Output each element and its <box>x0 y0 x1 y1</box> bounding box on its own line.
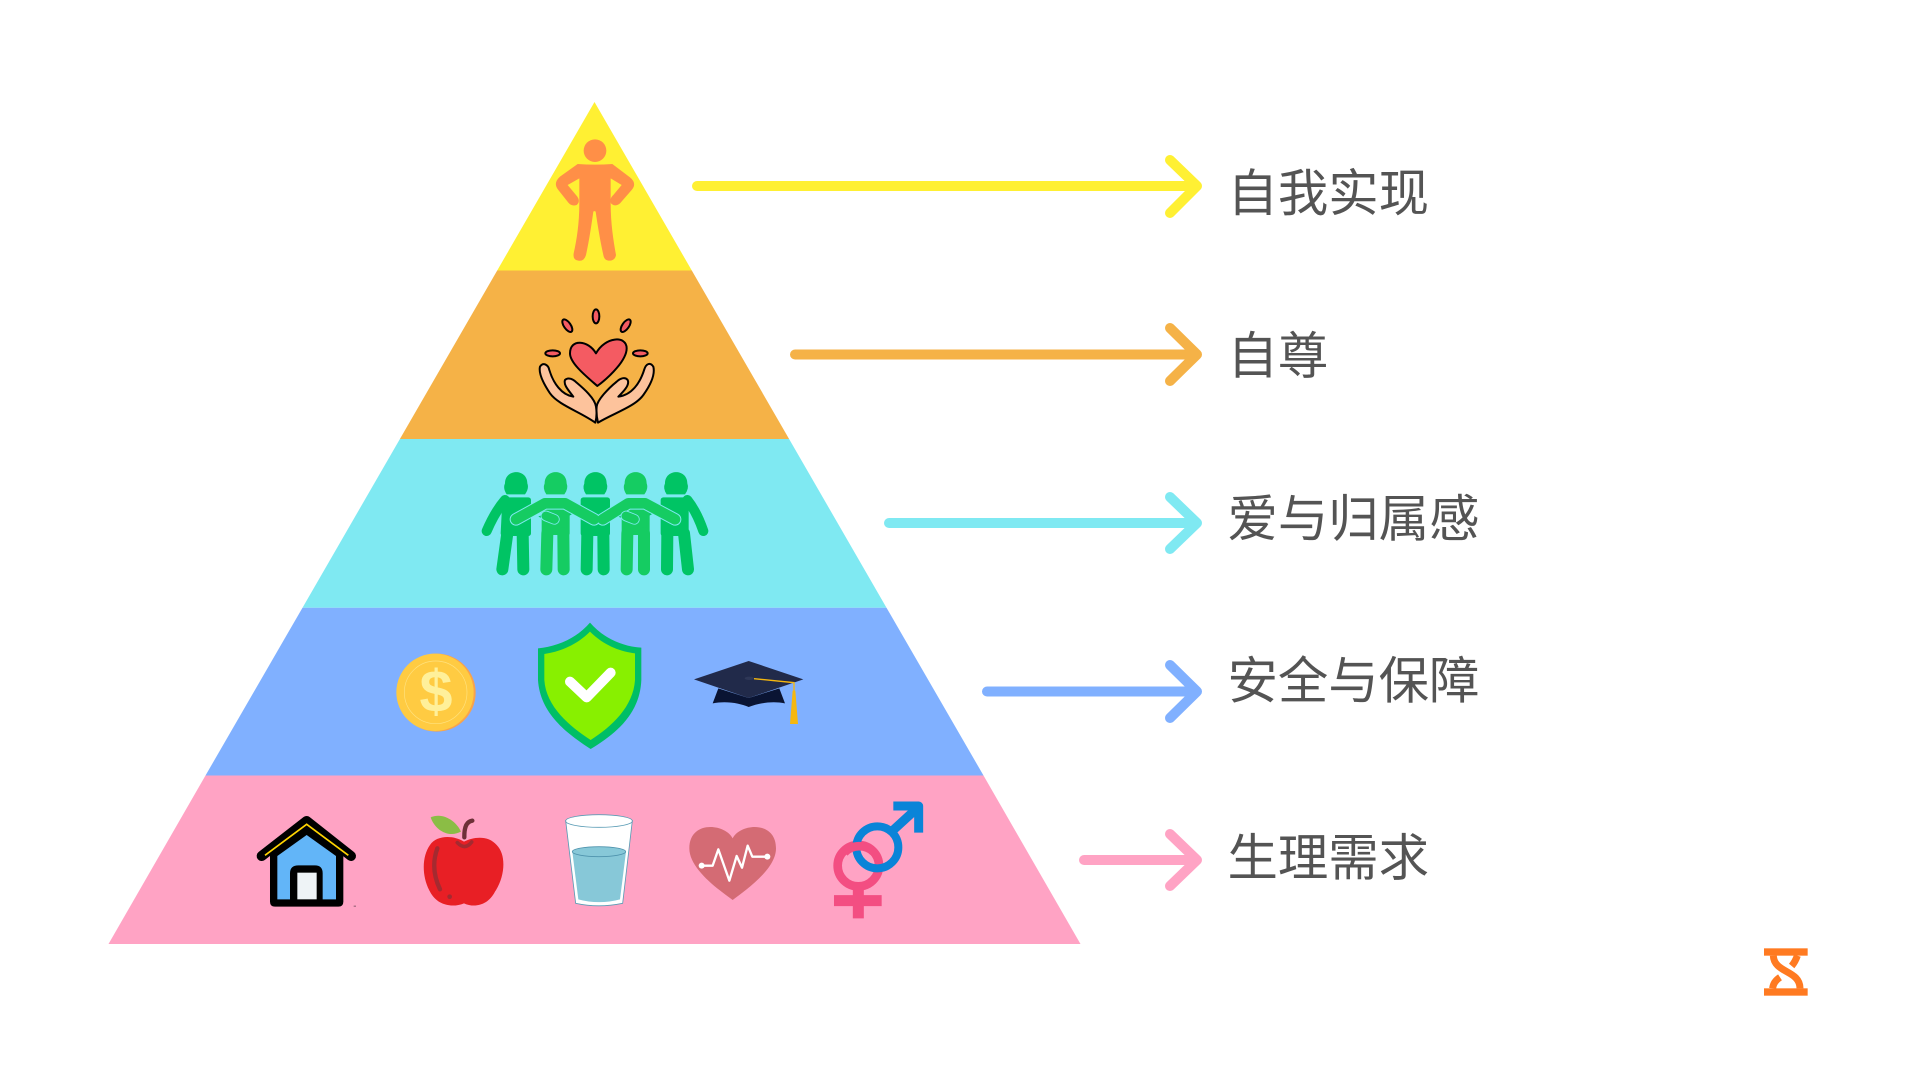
arrow: esteem <box>795 328 1197 381</box>
tier: esteem <box>400 270 789 439</box>
icon: gold coin: $ <box>419 658 452 725</box>
label: self-actualization: 自我实现 <box>1228 165 1429 222</box>
icon: house <box>262 821 356 907</box>
icon: heart with pulse <box>689 827 776 900</box>
pyramid <box>108 102 1080 944</box>
icon: standing person <box>556 139 634 261</box>
icon: glass of water <box>566 815 632 906</box>
tier: physiological <box>108 776 1080 944</box>
tier: self-actualization <box>497 102 692 270</box>
arrow: physiological <box>1084 834 1197 886</box>
label: physiological: 生理需求 <box>1228 830 1429 886</box>
tier: safety <box>206 608 984 776</box>
icon: apple <box>424 816 503 906</box>
arrow: love and belonging <box>889 497 1197 549</box>
icon: hands holding heart <box>540 309 654 423</box>
label: safety: 安全与保障 <box>1228 652 1479 710</box>
icon: gender symbols <box>834 806 919 918</box>
label: esteem: 自尊 <box>1228 328 1328 384</box>
icon: shield with check <box>538 623 641 749</box>
icon: graduation cap <box>694 661 803 724</box>
icon: gold coin <box>396 654 476 732</box>
arrow: self-actualization <box>697 160 1197 213</box>
arrow: safety <box>987 665 1197 718</box>
tier: love and belonging <box>302 439 886 608</box>
icon: group of people <box>487 472 703 569</box>
label: love and belonging: 爱与归属感 <box>1228 490 1479 548</box>
logo: hourglass mark <box>1764 948 1808 996</box>
